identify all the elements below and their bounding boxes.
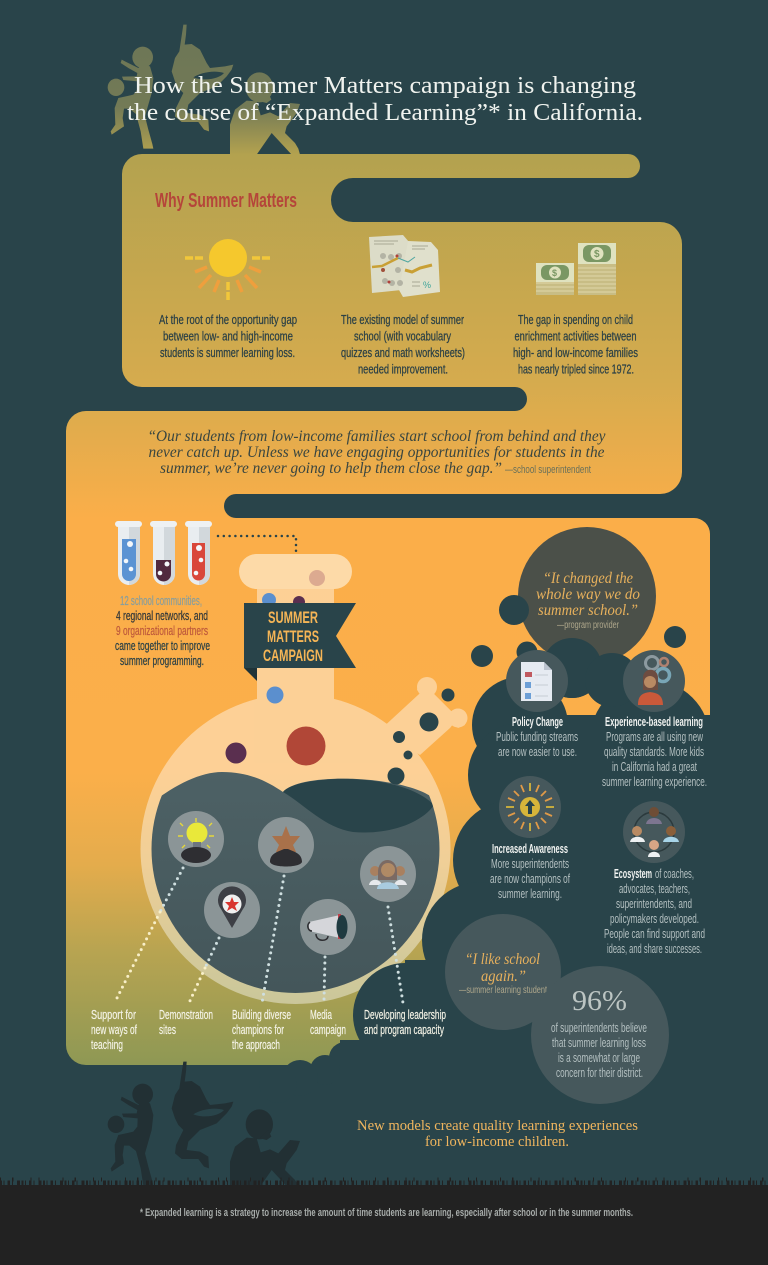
banner	[244, 603, 356, 681]
flask icon: lightbulb	[168, 811, 224, 867]
title: How the Summer Matters campaign is changing	[134, 73, 636, 99]
outcome: experience-based learning: Experience-based learning	[605, 714, 703, 729]
quote bubble: student: again.”	[481, 968, 526, 985]
labels under flask: campaign	[310, 1022, 346, 1037]
quote bubble: program provider	[471, 527, 686, 707]
text: spending gap: high- and low-income families	[513, 345, 638, 360]
icon: radiating arrow	[506, 783, 554, 831]
icon: sun	[185, 239, 272, 302]
labels under flask: champions for	[232, 1022, 284, 1037]
text: opportunity gap	[159, 312, 297, 360]
dotted leader: developing leadership	[388, 907, 403, 1003]
text: partners: came together to improve	[115, 638, 210, 653]
outcome: experience-based learning	[602, 650, 707, 789]
conclusion text: for low-income children.	[425, 1134, 569, 1150]
outcome: policy change: Policy Change	[512, 714, 563, 729]
text: partners	[115, 593, 210, 668]
title: the course of “Expanded Learning”* in California.	[127, 100, 643, 126]
outcome: ecosystem: of coaches,	[655, 866, 694, 881]
outcome: ecosystem: Ecosystem	[614, 866, 652, 881]
conclusion text	[357, 1118, 638, 1150]
text: existing model: needed improvement.	[358, 362, 448, 376]
labels under flask: Developing leadership	[364, 1007, 446, 1022]
quote bubble: program provider: —program provider	[557, 620, 619, 631]
flask	[140, 554, 468, 1004]
icon: money stacks: $	[594, 249, 600, 260]
outcome: increased awareness: summer learning.	[498, 886, 562, 901]
text: spending gap	[513, 312, 638, 376]
stat bubble: 96%: of superintendents believe	[551, 1020, 647, 1035]
labels under flask: Building diverse	[232, 1007, 291, 1022]
banner: SUMMER	[268, 608, 318, 627]
text: opportunity gap: At the root of the opportunity gap	[159, 312, 297, 327]
labels under flask: and program capacity	[364, 1022, 444, 1037]
banner: MATTERS	[267, 627, 319, 646]
icon: person with gears	[638, 656, 670, 705]
outcome: experience-based learning: in California had a great	[612, 759, 697, 774]
quote: school superintendent	[148, 428, 606, 477]
dark cloud	[259, 638, 768, 1115]
text: opportunity gap: between low- and high-income	[163, 328, 293, 344]
dotted leader lines	[116, 868, 325, 1003]
text: existing model	[341, 312, 465, 376]
text: partners: 4 regional networks, and	[116, 608, 208, 623]
text: spending gap: The gap in spending on child	[518, 312, 633, 327]
flask icon: map pin	[204, 882, 260, 938]
dotted connector	[218, 536, 296, 551]
outcome: experience-based learning: summer learning experience.	[602, 774, 707, 789]
banner: CAMPAIGN	[263, 646, 323, 665]
quote bubble: student	[445, 914, 561, 1030]
outcome: ecosystem: superintendents, and	[616, 896, 692, 911]
icon: connected people	[630, 807, 679, 857]
outcome: experience-based learning: Programs are all using new	[606, 729, 703, 744]
bottom kids silhouette	[108, 1062, 300, 1192]
outcome: experience-based learning: quality standards. More kids	[604, 744, 704, 759]
icon: worksheets	[369, 235, 440, 297]
bubbles	[226, 570, 454, 784]
quote: school superintendent: “Our students from low-income families start school from behind and they	[148, 428, 606, 445]
labels under flask: Support for	[91, 1007, 136, 1022]
quote bubble: student: —summer learning student	[459, 984, 547, 996]
quote bubble: program provider: “It changed the	[543, 570, 633, 587]
text: partners: 9 organizational partners	[116, 623, 208, 638]
outcome: ecosystem	[604, 801, 705, 956]
heading: why summer matters: Why Summer Matters	[155, 190, 297, 212]
text: spending gap: has nearly tripled since 1972.	[518, 362, 634, 376]
stat bubble: 96%: concern for their district.	[556, 1065, 643, 1080]
serpentine panel	[66, 154, 710, 1065]
outcome: increased awareness: More superintendents	[491, 856, 569, 871]
flask body silhouette	[140, 585, 468, 1004]
text: existing model: The existing model of summer	[341, 312, 464, 327]
quote: school superintendent: —school superintendent	[505, 464, 591, 476]
stat bubble: 96%: is a somewhat or large	[558, 1050, 640, 1065]
stat bubble: 96%: that summer learning loss	[552, 1035, 646, 1050]
conclusion text: New models create quality learning experiences	[357, 1118, 638, 1134]
outcome: ecosystem: advocates, teachers,	[619, 881, 690, 896]
stat bubble: 96%	[531, 966, 669, 1104]
icon: money stacks: $	[552, 268, 557, 278]
outcome: increased awareness: are now champions of	[490, 871, 570, 886]
top kids silhouette	[108, 25, 300, 155]
flask icon: megaphone	[300, 899, 356, 955]
grass and ground	[0, 1180, 768, 1265]
text: opportunity gap: students is summer learning loss.	[160, 345, 295, 360]
labels under flask	[91, 1007, 446, 1052]
icon: worksheets: %	[423, 280, 431, 290]
text: partners: 12 school communities,	[120, 593, 202, 608]
quote: school superintendent: never catch up. Unless we have engaging opportunities for students in the	[148, 444, 605, 461]
outcome: policy change	[496, 650, 578, 759]
outcome: policy change: Public funding streams	[496, 729, 578, 744]
icon: money stacks	[536, 243, 616, 295]
text: existing model: school (with vocabulary	[354, 328, 451, 344]
outcome: ecosystem: People can find support and	[604, 926, 705, 941]
labels under flask: Demonstration	[159, 1007, 213, 1022]
labels under flask: Media	[310, 1007, 332, 1022]
labels under flask: the approach	[232, 1037, 280, 1052]
outcome: increased awareness	[490, 776, 570, 901]
text: spending gap: enrichment activities between	[514, 328, 636, 344]
quote bubble: program provider: whole way we do	[536, 586, 640, 603]
text: partners: summer programming.	[120, 653, 204, 668]
labels under flask: new ways of	[91, 1022, 137, 1037]
outcome: ecosystem: policymakers developed.	[610, 911, 699, 926]
labels under flask: teaching	[91, 1037, 123, 1052]
icon: checklist	[521, 662, 552, 701]
outcome: policy change: are now easier to use.	[498, 744, 577, 759]
quote: school superintendent: summer, we’re never going to help them close the gap.”	[160, 460, 502, 477]
flask icon: star champion	[258, 817, 314, 873]
quote bubble: program provider: summer school.”	[538, 602, 638, 619]
icon: test tubes	[115, 521, 212, 585]
quote bubble: student: “I like school	[465, 951, 540, 968]
outcome: ecosystem: ideas, and share successes.	[607, 941, 702, 956]
text: existing model: quizzes and math worksheets)	[341, 345, 465, 360]
liquid	[150, 772, 445, 1000]
outcome: increased awareness: Increased Awareness	[492, 841, 568, 856]
title	[127, 73, 643, 126]
flask icon: group	[360, 846, 416, 902]
stat bubble: 96%: 96%	[572, 986, 627, 1017]
labels under flask: sites	[159, 1022, 176, 1037]
